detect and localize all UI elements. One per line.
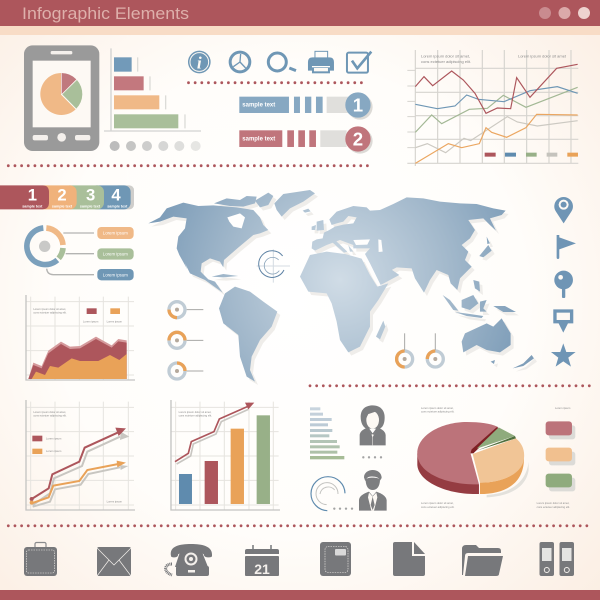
bar chart with arrow: cons ectetuer adipiscing elit. bbox=[179, 414, 212, 418]
step tabs 1 to 4: 2 bbox=[57, 186, 67, 205]
header band bbox=[0, 0, 600, 35]
icon: notebook bbox=[320, 542, 351, 576]
area chart: Lorem ipsum bbox=[107, 320, 123, 324]
icon: calendar bbox=[245, 545, 279, 577]
line chart with arrows: cons ectetuer adipiscing elit. bbox=[33, 414, 67, 418]
small ring gauges bbox=[169, 302, 443, 379]
icon: businessman bbox=[333, 470, 387, 511]
line chart with arrows: Lorem ipsum bbox=[46, 436, 62, 440]
sample bar 2: 2 bbox=[353, 129, 363, 150]
line chart: five series bbox=[407, 50, 578, 166]
sample bar 1 bbox=[239, 92, 373, 120]
pie chart legend and captions: Lorem ipsum dolor sit amet, bbox=[421, 501, 454, 505]
title: Infographic Elements bbox=[22, 4, 189, 23]
dotted divider bbox=[8, 164, 369, 167]
bar chart with arrow bbox=[171, 400, 280, 510]
pie chart legend and captions bbox=[421, 406, 575, 509]
step tabs 1 to 4: sample text bbox=[22, 204, 43, 208]
pie chart legend and captions: cons ectetuer adipiscing elit. bbox=[537, 505, 570, 509]
map pin icons bbox=[551, 197, 576, 367]
bar chart with arrow: Lorem ipsum dolor sit amet, bbox=[179, 410, 212, 414]
window dots bbox=[539, 7, 590, 19]
area chart: Lorem ipsum bbox=[83, 320, 99, 324]
world map bbox=[148, 190, 537, 385]
line chart with arrows: Lorem ipsum bbox=[46, 449, 62, 453]
icon: rotary telephone bbox=[166, 544, 212, 576]
icon: document bbox=[393, 542, 425, 576]
step tabs 1 to 4: 4 bbox=[111, 186, 121, 205]
line chart with arrows bbox=[26, 400, 135, 510]
dotted divider bbox=[8, 524, 592, 527]
pie chart legend and captions: cons ectetuer adipiscing elit. bbox=[421, 410, 455, 414]
icon: envelope bbox=[97, 547, 131, 576]
step tabs 1 to 4: sample text bbox=[52, 204, 73, 208]
stacked bars list bbox=[310, 407, 344, 459]
3D pie chart bbox=[417, 422, 529, 497]
icon: clock bbox=[229, 51, 251, 73]
line chart with arrows: Lorem ipsum dolor sit amet, bbox=[33, 410, 66, 414]
pie chart legend and captions: cons ectetuer adipiscing elit. bbox=[421, 505, 455, 509]
area chart bbox=[26, 295, 135, 380]
step tabs 1 to 4: sample text bbox=[107, 204, 128, 208]
icon: smartphone with pie chart bbox=[24, 45, 99, 151]
step tabs 1 to 4: 1 bbox=[28, 186, 37, 205]
icon: businesswoman bbox=[360, 405, 386, 458]
icon: checkbox bbox=[347, 52, 371, 73]
step tabs 1 to 4 bbox=[0, 185, 134, 209]
pie chart legend and captions: Lorem ipsum dolor sit amet, bbox=[421, 406, 454, 410]
line chart: five series: Lorem ipsum dolor sit amet, bbox=[421, 53, 470, 58]
sample bar 2: sample text bbox=[242, 137, 275, 143]
pie chart legend and captions: Lorem ipsum bbox=[555, 406, 571, 410]
donut chart with labels: Lorem ipsum bbox=[103, 272, 128, 277]
sample bar 2 bbox=[239, 126, 373, 154]
step tabs 1 to 4: sample text bbox=[80, 204, 101, 208]
area chart: Lorem ipsum dolor sit amet, bbox=[33, 307, 66, 311]
icon: info bbox=[188, 51, 211, 73]
icon: calendar: 21 bbox=[254, 561, 270, 577]
pie chart legend and captions: Lorem ipsum dolor sit amet, bbox=[537, 501, 570, 505]
area chart: cons ectetuer adipiscing elit. bbox=[33, 311, 67, 315]
icon: printer bbox=[308, 51, 334, 73]
bar chart: horizontal bars bbox=[104, 48, 201, 151]
footer band bbox=[0, 590, 600, 600]
line chart: five series: cons ectetuer adipiscing elit. bbox=[421, 59, 471, 64]
line chart with arrows: Lorem ipsum bbox=[107, 499, 123, 503]
step tabs 1 to 4: 3 bbox=[86, 186, 95, 205]
dotted divider bbox=[188, 81, 368, 84]
donut chart with labels: Lorem ipsum bbox=[103, 252, 128, 257]
sample bar 1: sample text bbox=[242, 103, 275, 109]
icon: info: i bbox=[197, 53, 202, 72]
dotted divider bbox=[310, 384, 592, 387]
donut chart with labels bbox=[27, 227, 134, 280]
sample bar 1: 1 bbox=[353, 95, 363, 116]
icon: binders bbox=[540, 542, 574, 576]
icon: folder bbox=[462, 545, 503, 576]
concentric arcs bbox=[311, 477, 345, 511]
target crosshair bbox=[257, 249, 290, 283]
icon: briefcase bbox=[24, 542, 57, 576]
icon: magnifier bbox=[268, 53, 296, 71]
donut chart with labels: Lorem ipsum bbox=[103, 231, 128, 236]
line chart: five series: Lorem ipsum dolor sit amet bbox=[518, 53, 567, 58]
